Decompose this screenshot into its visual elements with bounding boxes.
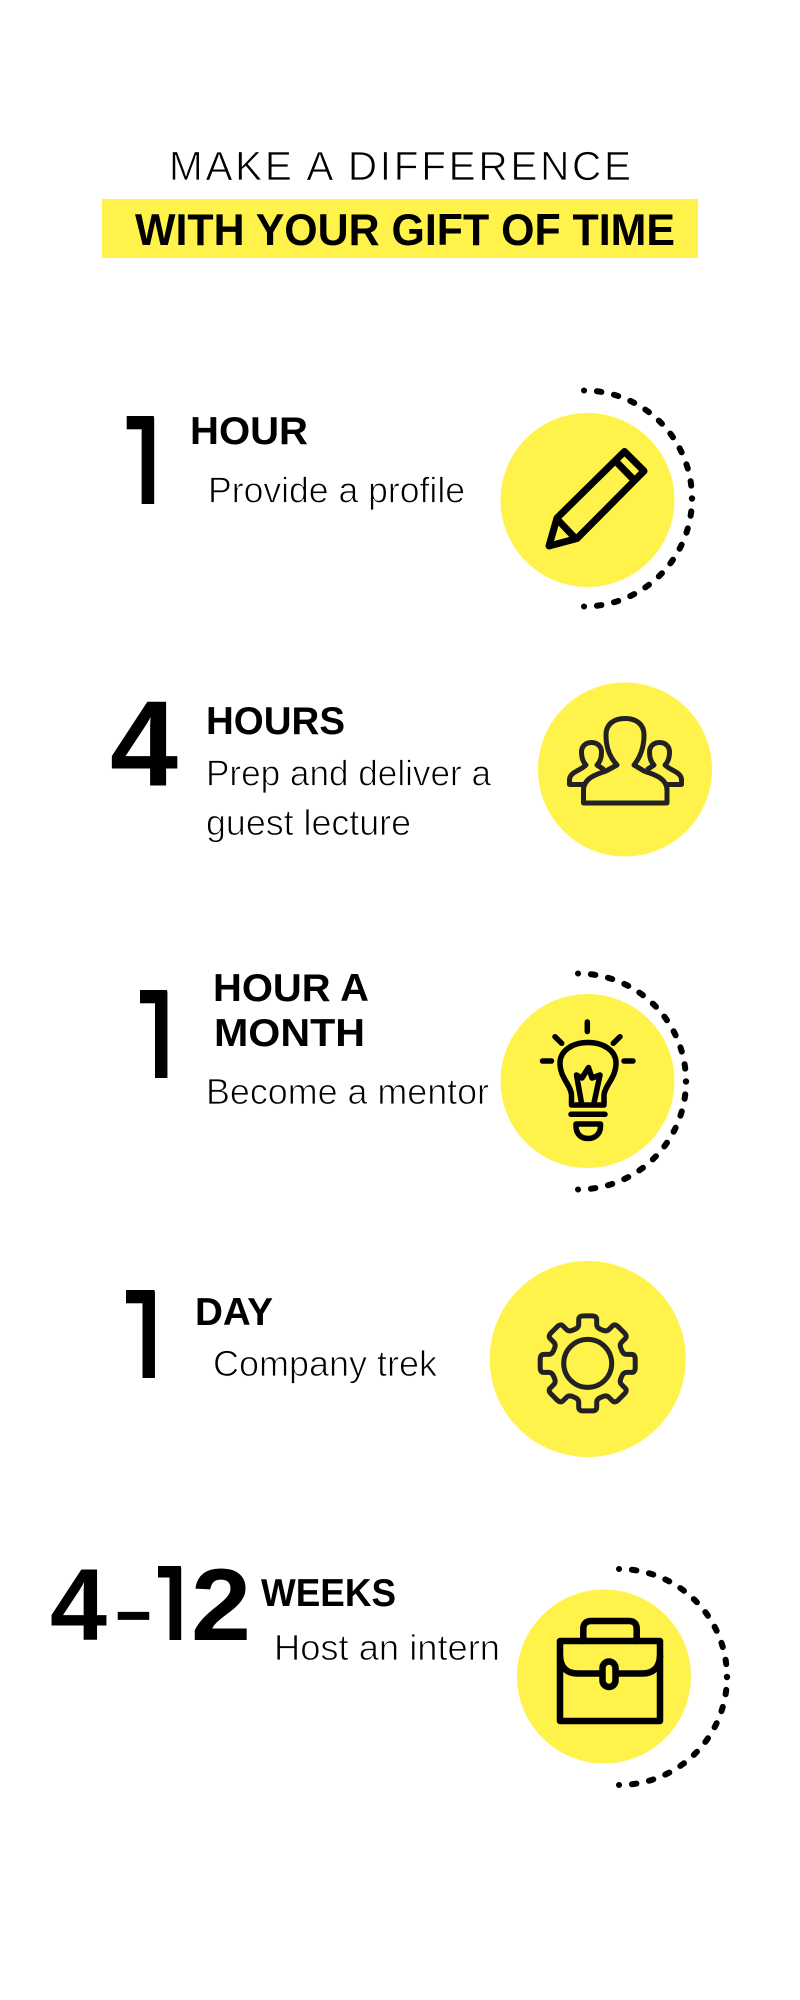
number 1: 1 bbox=[109, 407, 179, 522]
text: prep and deliver a guest lecture bbox=[206, 752, 492, 843]
dashed arc bbox=[578, 974, 689, 1190]
icon: light bulb bbox=[542, 1022, 633, 1138]
number 1: 1 bbox=[110, 1281, 180, 1396]
title highlight band bbox=[102, 199, 698, 258]
dashed arc bbox=[619, 1569, 730, 1785]
yellow circle bbox=[500, 413, 674, 587]
heading: hour a month: HOUR A bbox=[213, 967, 369, 1010]
number 4-12: - bbox=[112, 1551, 155, 1665]
heading: hour a month bbox=[213, 967, 369, 1055]
number 1 bbox=[140, 990, 168, 1078]
yellow circle bbox=[517, 1590, 691, 1764]
panel: 1 day bbox=[110, 1261, 686, 1457]
heading: hour a month: MONTH bbox=[214, 1012, 365, 1055]
yellow circle bbox=[500, 994, 674, 1168]
panel: 1 hour a month bbox=[122, 967, 689, 1190]
text: provide a profile: Provide a profile bbox=[208, 470, 465, 510]
yellow circle bbox=[490, 1261, 686, 1457]
icon: gear bbox=[540, 1316, 635, 1411]
title line two: WITH YOUR GIFT OF TIME bbox=[135, 206, 675, 255]
number 1 bbox=[126, 1290, 155, 1378]
number 1 bbox=[126, 416, 154, 504]
text: prep and deliver a guest lecture: guest lecture bbox=[206, 802, 411, 843]
panel: 4-12 weeks bbox=[50, 1548, 730, 1785]
heading: day: DAY bbox=[195, 1291, 273, 1334]
dashed arc bbox=[584, 390, 695, 606]
heading: weeks: WEEKS bbox=[261, 1572, 396, 1615]
text: host an intern: Host an intern bbox=[274, 1627, 500, 1668]
title line one: MAKE A DIFFERENCE bbox=[169, 143, 631, 189]
number 4-12: 4 bbox=[50, 1548, 107, 1662]
heading: hour: HOUR bbox=[190, 410, 308, 453]
text: prep and deliver a guest lecture: Prep and deliver a bbox=[206, 752, 492, 794]
number 4-12 bbox=[52, 1566, 247, 1640]
number 4-12: 2 bbox=[191, 1548, 251, 1662]
icon: pencil bbox=[549, 452, 644, 546]
icon: briefcase bbox=[560, 1621, 660, 1721]
number 4: 4 bbox=[110, 676, 178, 812]
panel: 1 hour bbox=[109, 390, 695, 606]
panel: 4 hours bbox=[110, 676, 712, 856]
title bbox=[102, 143, 698, 258]
heading: hours: HOURS bbox=[206, 700, 345, 743]
text: company trek: Company trek bbox=[213, 1343, 438, 1384]
yellow circle bbox=[538, 682, 712, 856]
text: become a mentor: Become a mentor bbox=[206, 1071, 489, 1112]
icon: people bbox=[570, 718, 682, 803]
number 1: 1 bbox=[122, 981, 192, 1096]
number 4-12: 1 bbox=[142, 1558, 201, 1655]
